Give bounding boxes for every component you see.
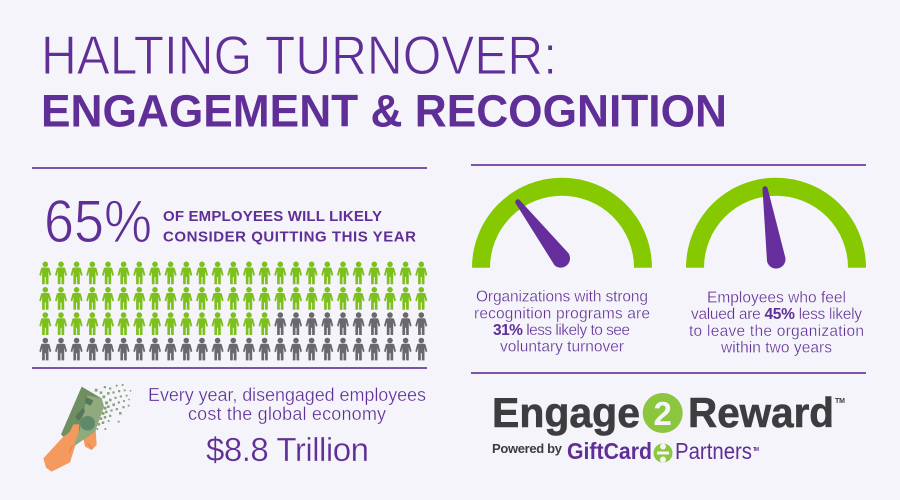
- gauge caption: 31 percent: Organizations with strong: [476, 289, 648, 306]
- icon: hand holding money dissolving: [43, 384, 131, 472]
- logo: Engage2Reward powered by GiftCard Partners: GiftCard: [567, 438, 652, 464]
- gauge arc: [481, 187, 643, 268]
- gauge caption: 31 percent: voluntary turnover: [500, 339, 624, 356]
- tagline: Powered by: [492, 441, 563, 456]
- gauge caption: 31 percent: 31% less likely to see: [493, 322, 630, 339]
- logo: Engage2Reward powered by GiftCard Partners: Reward: [688, 389, 834, 436]
- logo: Engage2Reward powered by GiftCard Partners: Partners: [675, 438, 752, 464]
- title line: engagement and recognition: ENGAGEMENT & RECOGNITION: [41, 86, 727, 136]
- cost statement: [148, 385, 426, 468]
- gauge needle: [515, 199, 570, 268]
- gauge needle: [762, 186, 785, 269]
- badge: number 2: 2: [654, 395, 672, 432]
- gauge caption: 45 percent: Employees who feel: [707, 290, 846, 307]
- cost text: Every year, disengaged employees: [148, 385, 426, 405]
- badge: number 2: [643, 393, 683, 433]
- wordmark: Engage: [492, 389, 640, 436]
- icon: partners handshake: [654, 444, 672, 462]
- gauge caption: 45 percent: to leave the organization: [689, 323, 864, 340]
- stat caption: OF EMPLOYEES WILL LIKELY: [163, 208, 382, 225]
- gauge caption: 45 percent: within two years: [720, 340, 832, 357]
- big number: 65%: [44, 188, 152, 255]
- logo: Engage2Reward powered by GiftCard Partners: TM: [835, 398, 845, 405]
- stat: 65 percent: [44, 188, 416, 255]
- title: [41, 24, 727, 136]
- gauge: 31 percent: [481, 187, 643, 268]
- cost statement: cost the global economy: [188, 404, 386, 424]
- gauge caption: 31 percent: recognition programs are: [474, 305, 650, 322]
- title line: halting turnover: HALTING TURNOVER:: [41, 24, 557, 86]
- gauge: 45 percent: [695, 186, 857, 269]
- logo: Engage2Reward powered by GiftCard Partners: [492, 389, 845, 464]
- gauge caption: 45 percent: [689, 290, 864, 357]
- cost figure: $8.8 Trillion: [206, 431, 369, 468]
- logo: Engage2Reward powered by GiftCard Partners: TM: [753, 447, 759, 453]
- stat: 65 percent: CONSIDER QUITTING THIS YEAR: [163, 229, 416, 246]
- gauge caption: 45 percent: valued are 45% less likely: [691, 306, 862, 323]
- gauge arc: [695, 187, 857, 268]
- people pictogram: 65 of 100 highlighted: [39, 262, 427, 360]
- gauge caption: 31 percent: [474, 289, 650, 356]
